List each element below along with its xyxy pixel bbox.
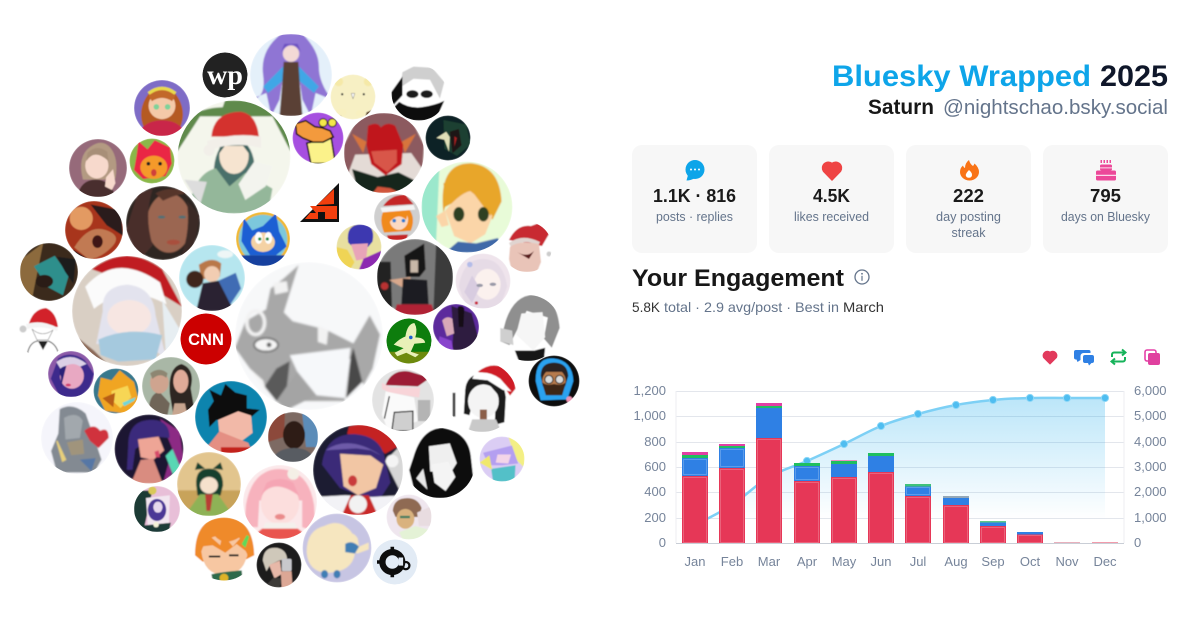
avatar: white haired girl — [456, 254, 510, 308]
month labels: Nov — [1055, 554, 1079, 569]
stat value: 795 — [1090, 186, 1121, 206]
stat value: 4.5K — [813, 186, 850, 206]
avatar: small santa sketch — [19, 308, 59, 353]
cumulative points — [803, 394, 1109, 465]
avatar: orange haired chibi — [192, 518, 256, 582]
avatar: golden super saiyan — [94, 368, 138, 414]
avatar: CNN: CNN — [188, 330, 224, 349]
avatar: dark haired woman photo — [126, 186, 200, 260]
month labels: May — [832, 554, 857, 569]
title: Bluesky Wrapped — [832, 60, 1091, 93]
month labels: Mar — [758, 554, 781, 569]
bar: Jun — [868, 453, 894, 543]
month labels: Feb — [721, 554, 743, 569]
avatar: dino with question eyes — [292, 112, 344, 164]
avatar: umbreon — [235, 262, 383, 410]
avatar: pink twin tails — [243, 465, 317, 539]
bar: Dec — [1092, 542, 1118, 544]
avatar: saiyan boy on blue — [195, 381, 267, 453]
cumulative area — [695, 398, 1105, 543]
right axis labels: 5,000 — [1134, 408, 1167, 423]
bar: Sep — [980, 521, 1006, 543]
icon: flame — [960, 160, 979, 180]
bar: May — [831, 460, 857, 543]
engagement summary — [632, 299, 884, 315]
avatar: manga santa hat — [372, 369, 434, 431]
avatar: ty beanie plush — [41, 402, 113, 474]
avatar: santa demon girl — [502, 222, 552, 272]
avatar: purple headphone girl — [433, 304, 479, 350]
right axis labels: 4,000 — [1134, 434, 1167, 449]
chart legend — [1043, 350, 1160, 366]
avatar: orange santa figure — [374, 194, 420, 240]
bar: Oct — [1017, 532, 1043, 543]
avatar: sonic — [236, 212, 290, 266]
left axis labels: 800 — [644, 434, 666, 449]
avatar: crown of lights girl — [134, 80, 190, 136]
bar: Aug — [943, 496, 969, 543]
stat value: 222 — [953, 186, 984, 206]
month labels: Jun — [871, 554, 891, 569]
panel: days on Bluesky — [1043, 145, 1168, 253]
avatar: CNN — [180, 314, 232, 364]
user name and handle: Saturn — [868, 96, 934, 119]
month labels: Sep — [981, 554, 1005, 569]
right axis labels: 2,000 — [1134, 484, 1167, 499]
icon: replies bubbles — [1074, 350, 1094, 366]
avatar: misato neon — [114, 414, 184, 484]
icon: info — [855, 270, 869, 284]
avatar: manga grey hair — [495, 295, 561, 361]
stat label: day posting — [936, 210, 1001, 224]
avatar: misato santa — [313, 425, 403, 515]
engagement summary: 5.8K — [632, 299, 661, 315]
avatar: gear logo — [372, 540, 418, 584]
left axis labels: 1,200 — [633, 383, 666, 398]
left axis labels: 200 — [644, 510, 666, 525]
avatar: brown haired boy on sky — [179, 245, 245, 311]
avatar: Washington Post: wp — [207, 60, 243, 91]
avatar: black hair hand over mouth — [405, 428, 475, 498]
left axis labels: 1,000 — [633, 408, 666, 423]
user name and handle — [868, 96, 1168, 119]
avatar: colourful glitch — [480, 436, 524, 482]
chart: monthly engagement — [633, 383, 1167, 569]
icon: likes heart — [1043, 351, 1057, 364]
icon: cake — [1096, 160, 1116, 180]
engagement summary: total · 2.9 avg/post · Best in — [664, 299, 839, 315]
right axis labels: 0 — [1134, 535, 1141, 550]
month labels: Jul — [910, 554, 926, 569]
bar: Mar — [756, 403, 782, 543]
avatar bubble cluster — [17, 34, 580, 588]
avatar: floral purple — [134, 486, 180, 532]
avatar: brown bob girl — [69, 139, 127, 197]
stat value: 1.1K · 816 — [653, 186, 736, 206]
stacked bars — [682, 403, 1118, 543]
left axis labels: 600 — [644, 459, 666, 474]
left axis labels: 0 — [659, 535, 666, 550]
avatar: red demon woman — [344, 113, 424, 193]
avatar: selfie with phone — [256, 542, 302, 588]
panel: likes received — [769, 145, 894, 253]
stat label: likes received — [794, 210, 869, 224]
panel: posts and replies — [632, 145, 757, 253]
avatar: manga girl drinking — [452, 364, 516, 432]
bar: Feb — [719, 444, 745, 543]
right axis labels — [1134, 383, 1167, 550]
stat label: posts · replies — [656, 210, 733, 224]
panel: day posting streak — [906, 145, 1031, 253]
avatar: man by brick building — [268, 412, 318, 462]
avatar: red fox character — [130, 138, 174, 184]
engagement summary: March — [843, 299, 884, 315]
avatar: couple selfie — [142, 357, 200, 415]
bar: Jan — [682, 452, 708, 543]
grid lines — [676, 391, 1124, 544]
icon: quotes squares — [1145, 350, 1160, 365]
avatar: jojo — [336, 224, 382, 270]
avatar: woman mirror selfie — [377, 239, 453, 315]
left axis labels: 400 — [644, 484, 666, 499]
left axis labels — [633, 383, 666, 550]
icon: heart — [823, 162, 841, 180]
avatar: Washington Post — [202, 52, 248, 98]
avatar: white haired santa elf — [72, 256, 182, 366]
bar: Nov — [1054, 542, 1080, 543]
bar: Jul — [905, 484, 931, 543]
avatar: purple haired character — [250, 34, 332, 116]
user name and handle: @nightschao.bsky.social — [943, 97, 1168, 119]
icon: chat bubble — [686, 160, 704, 180]
avatar: blonde boy — [422, 162, 512, 252]
month labels: Dec — [1093, 554, 1117, 569]
avatar: gojo manga — [392, 66, 446, 120]
right axis labels: 1,000 — [1134, 510, 1167, 525]
month labels: Jan — [685, 554, 705, 569]
bar: Apr — [794, 463, 820, 543]
right axis labels: 3,000 — [1134, 459, 1167, 474]
month labels: Apr — [797, 554, 818, 569]
title: 2025 — [1100, 60, 1168, 93]
avatar: purple haired woman — [48, 351, 94, 397]
icon: reposts arrows — [1112, 350, 1126, 364]
cumulative line — [695, 398, 1105, 525]
month labels — [685, 554, 1117, 569]
avatar: yellow plush — [330, 74, 376, 120]
avatar: upside down man — [65, 201, 123, 259]
avatar: RF logo — [300, 183, 339, 222]
month labels: Aug — [944, 554, 968, 569]
avatar: green-haired santa girl — [178, 100, 290, 214]
avatar: cat girl in wheat — [177, 452, 241, 516]
right axis labels: 6,000 — [1134, 383, 1167, 398]
stat label: days on Bluesky — [1061, 210, 1151, 224]
bar highlights — [684, 440, 1042, 542]
stat label line two: streak — [952, 226, 986, 240]
avatar: bearded bitmoji — [528, 356, 580, 406]
heading: your engagement: Your Engagement — [632, 265, 844, 292]
month labels: Oct — [1020, 554, 1040, 569]
avatar: celebi — [386, 318, 432, 364]
avatar: fairy — [386, 494, 432, 540]
avatar: teal shirt photo — [20, 243, 78, 301]
avatar: mareep — [302, 514, 372, 582]
avatar: dark green silhouette — [426, 116, 470, 160]
